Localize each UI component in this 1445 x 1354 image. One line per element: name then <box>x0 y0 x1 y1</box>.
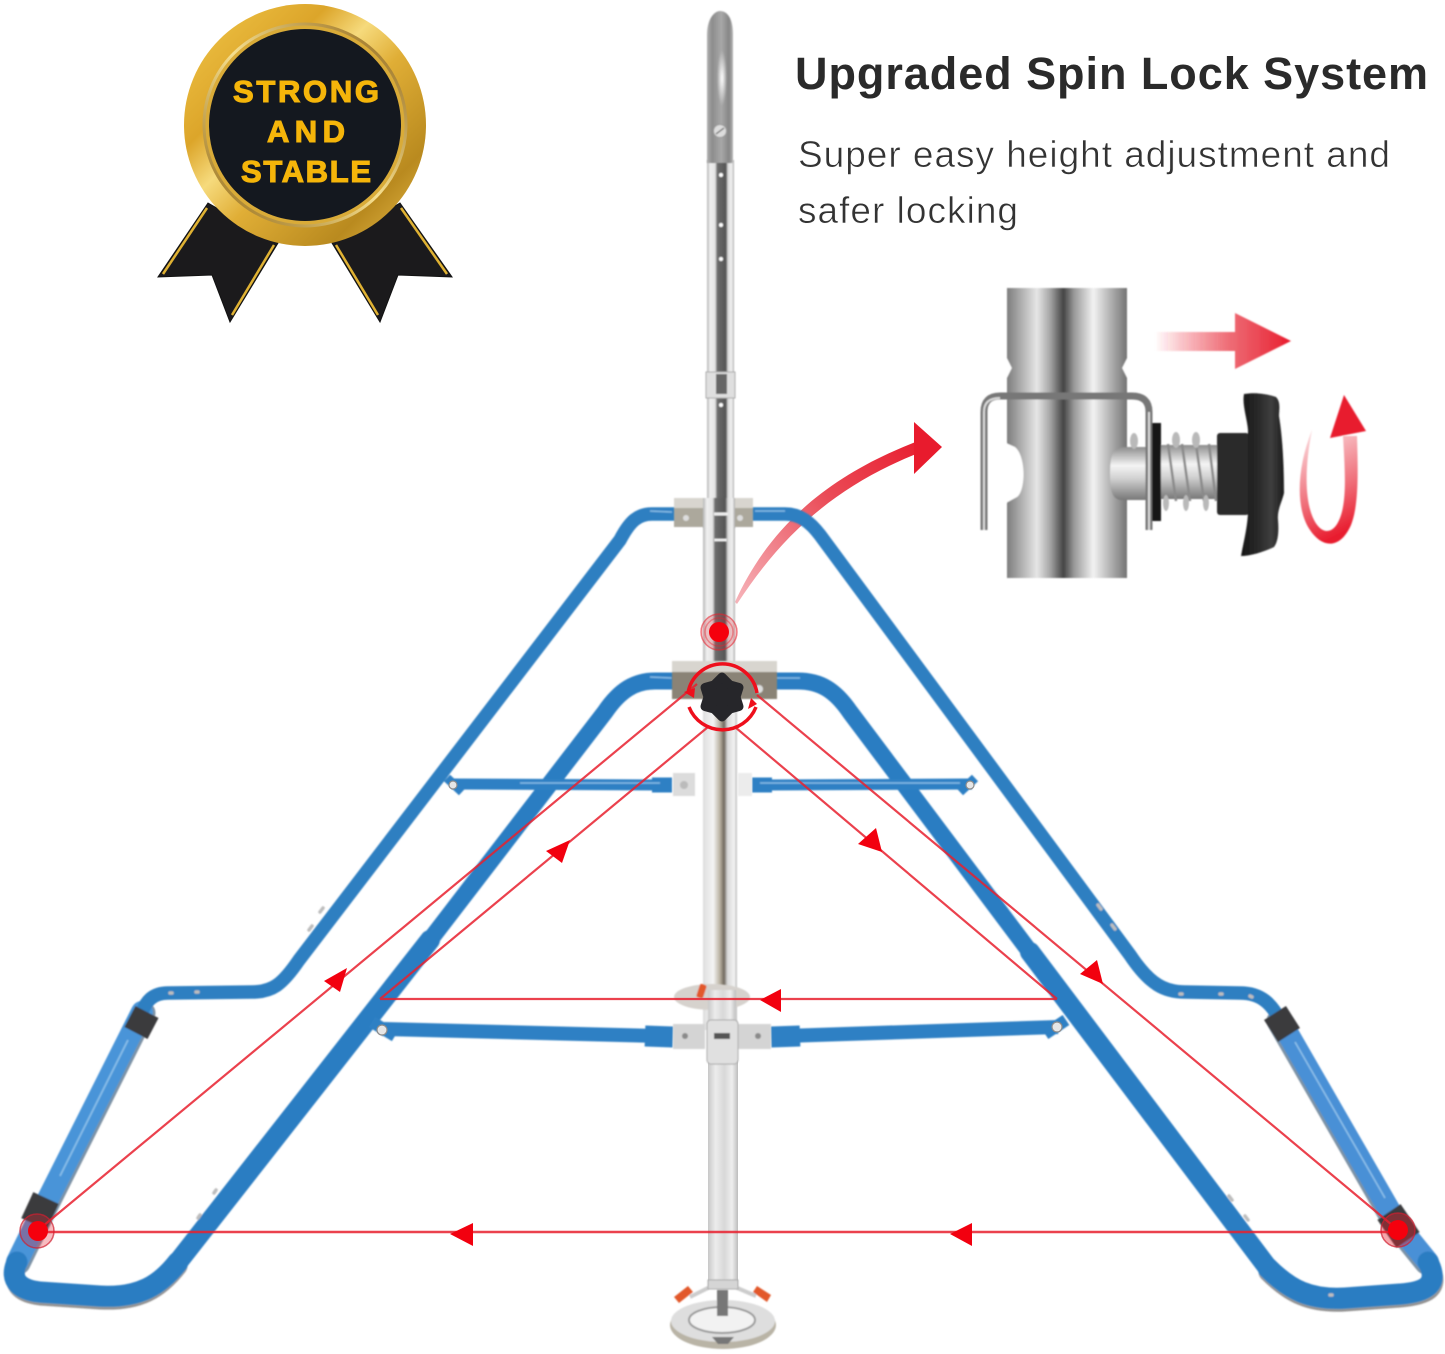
medal: black centre <box>209 29 401 221</box>
badge: strong and stable <box>158 4 452 322</box>
title: Upgraded Spin Lock System <box>795 48 1428 99</box>
marker: right foot point <box>1381 1213 1415 1247</box>
middle frame clamp <box>672 661 777 699</box>
arrow: callout to inset <box>735 422 942 604</box>
medal: gold ring <box>184 4 426 246</box>
ribbon: left tail <box>158 203 278 322</box>
ribbon: right tail <box>332 203 452 322</box>
inset: threaded bolt <box>1110 432 1220 511</box>
base foot disc <box>670 1280 776 1349</box>
pole: top handle <box>707 11 733 163</box>
inset: knob collar <box>1217 433 1249 515</box>
red direction arrowheads <box>324 828 1103 1246</box>
lower cross braces <box>372 1020 1066 1037</box>
left side bar <box>17 1012 144 1263</box>
medal: inner bevel <box>204 24 406 226</box>
spin direction arcs <box>684 664 757 730</box>
tube highlights <box>60 511 1385 1198</box>
right inner tube <box>770 681 1432 1298</box>
frame shadow <box>15 1266 1434 1302</box>
badge text: AND <box>267 114 345 149</box>
brace pins <box>377 781 1062 1035</box>
upper brace bracket <box>673 773 752 796</box>
left inner tube <box>14 681 680 1296</box>
right side bar <box>1278 1020 1428 1263</box>
red guide lines <box>37 684 1398 1232</box>
badge text <box>233 74 379 189</box>
frame bolts <box>170 905 1332 1295</box>
description text: Super easy height adjustment and <box>798 134 1390 175</box>
description text: safer locking <box>798 190 1018 231</box>
upper frame clamp <box>674 498 753 540</box>
mid-height stop disc <box>674 983 750 1030</box>
inset: metal tube <box>1007 288 1127 578</box>
lower brace bracket <box>673 1020 771 1064</box>
left outer tube <box>142 514 680 1012</box>
arrow: rotate knob <box>1300 395 1366 544</box>
foot grips <box>34 1012 1408 1240</box>
badge text: STRONG <box>233 74 379 109</box>
frame: gymnastic bar base <box>14 511 1434 1302</box>
inset: tube slot <box>1006 443 1024 503</box>
marker: left foot point <box>20 1214 54 1248</box>
inset: spin lock detail <box>984 288 1366 578</box>
inset: black knob <box>1241 393 1284 556</box>
inset: bent clamp <box>984 396 1149 530</box>
right outer tube <box>752 514 1280 1020</box>
pole: lower section <box>708 1060 738 1288</box>
inset: black washer <box>1152 423 1161 521</box>
pole: upper adjustable section <box>706 160 735 510</box>
marker: pole lock point <box>701 614 737 650</box>
arrow: pull right <box>1155 313 1291 369</box>
description text <box>798 134 1390 231</box>
pole: middle section <box>703 510 737 1030</box>
adjustment knob <box>705 677 739 717</box>
upper cross braces <box>447 778 975 792</box>
badge text: STABLE <box>241 154 371 189</box>
